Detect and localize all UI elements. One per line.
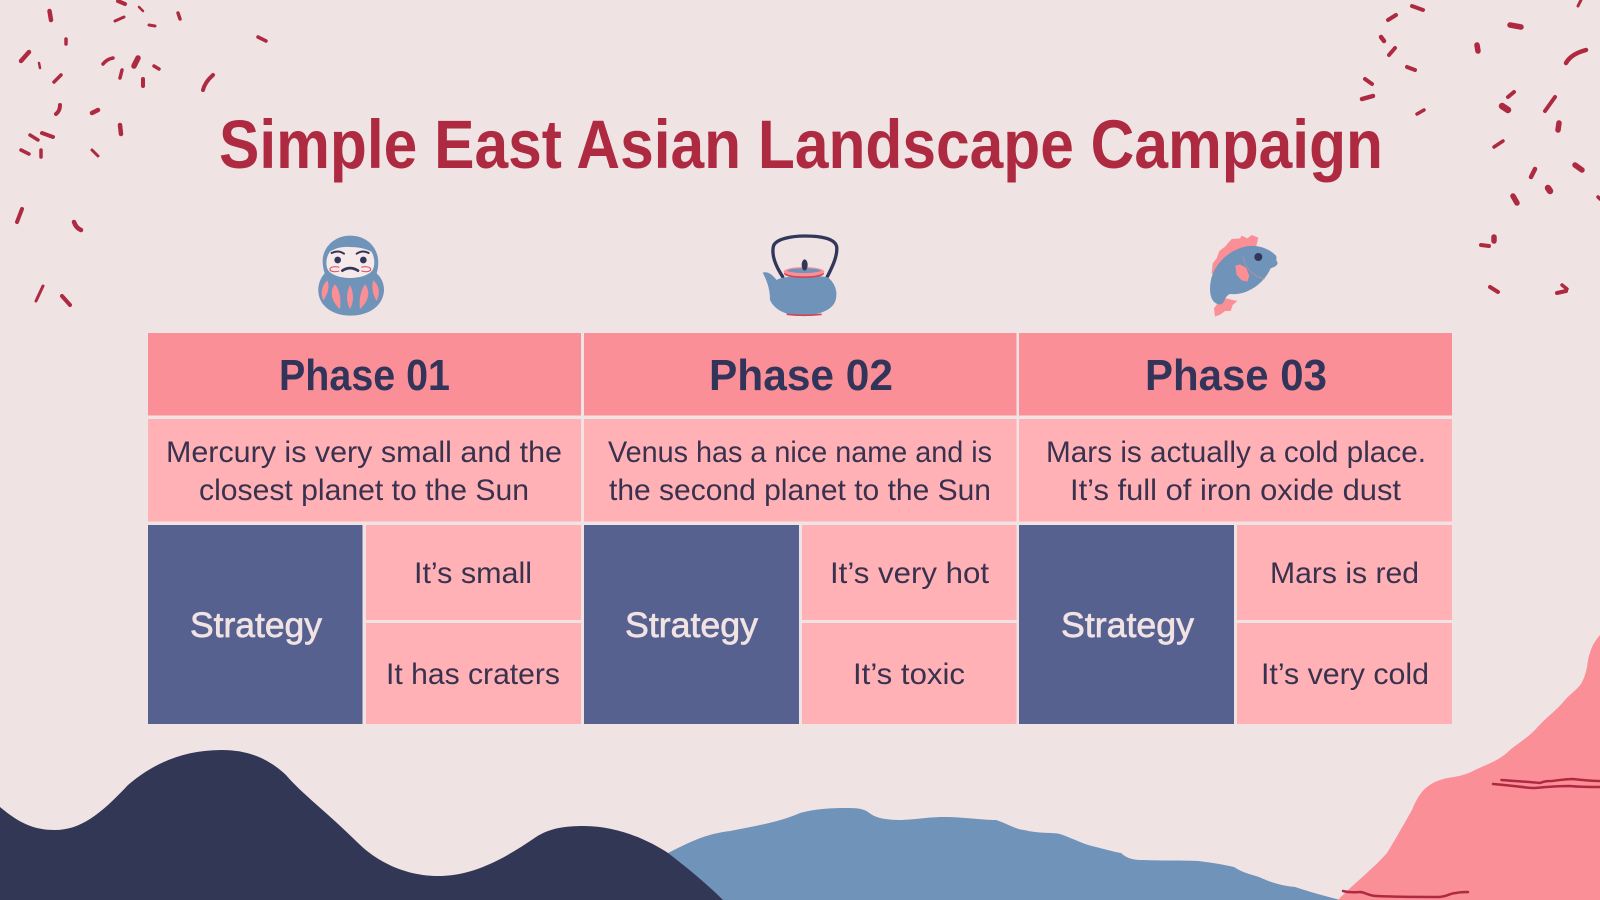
campaign table [148,333,1452,724]
phase 01 strategy block: Strategy [190,606,322,645]
decorative speckles: top right [1362,0,1600,293]
landscape: pink mountain [1338,635,1600,900]
phase 03 description [1019,419,1452,522]
title: Simple East Asian Landscape Campaign [219,106,1383,183]
phase 02 description [584,419,1016,522]
icon: daruma doll [318,236,384,316]
phase 01 strategy block [148,525,362,724]
phase 03 strategy item: cold [1237,623,1452,724]
phase 02 strategy item: toxic: It’s toxic [853,658,965,691]
phase 02 strategy block: Strategy [625,606,758,645]
phase 03 header [1019,333,1452,416]
landscape: blue mountain [640,808,1340,900]
phase 03 header: Phase 03 [1145,351,1327,400]
decorative speckles: top left [17,1,266,305]
phase 02 header [584,333,1016,416]
phase 02 strategy item: toxic [802,623,1016,724]
phase 02 strategy item: hot: It’s very hot [830,557,990,590]
phase 03 description: Mars is actually a cold place. [1046,436,1426,469]
phase 03 strategy block: Strategy [1061,606,1194,645]
phase 03 strategy item: red: Mars is red [1270,557,1419,590]
phase 02 strategy block [584,525,799,724]
phase 01 description: closest planet to the Sun [199,474,529,507]
phase 01 strategy item: craters [366,623,581,724]
phase 01 header [148,333,581,416]
landscape: navy mountains [0,750,723,900]
phase 02 description: Venus has a nice name and is [608,436,992,469]
phase 01 strategy item: small: It’s small [414,557,532,590]
phase 03 strategy item: red [1237,525,1452,620]
phase 03 description: It’s full of iron oxide dust [1070,474,1402,507]
phase 01 description [148,419,581,522]
phase 02 header: Phase 02 [709,351,893,400]
phase 02 description: the second planet to the Sun [609,474,991,507]
phase 01 header: Phase 01 [279,351,450,400]
phase 03 strategy item: cold: It’s very cold [1261,658,1429,691]
phase 02 strategy item: hot [802,525,1016,620]
icon: fish [1210,235,1278,317]
phase 03 strategy block [1019,525,1234,724]
phase 01 strategy item: small [366,525,581,620]
icon: teapot [763,236,837,316]
phase 01 strategy item: craters: It has craters [386,658,560,691]
red brush strokes on pink mountain [1343,779,1600,897]
phase 01 description: Mercury is very small and the [166,436,562,469]
